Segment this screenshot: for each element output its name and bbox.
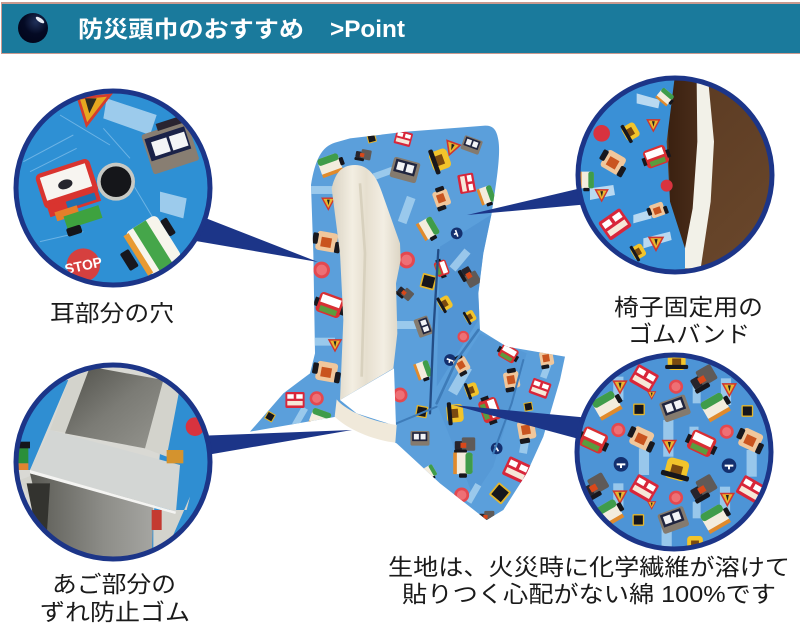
dark bus motif [142,118,199,174]
gray inner fabric upper [65,367,163,448]
title: 防災頭巾のおすすめ [78,16,304,42]
label: chin band [40,571,190,625]
fabric tyre stripes [590,93,672,248]
metal eyelet [97,163,135,201]
dark wood section [668,80,698,248]
subtitle point: >Point [330,16,405,43]
pointer wedge: ear hole [190,212,318,262]
blue fabric section [580,80,685,270]
pointer wedge: chin band [195,430,352,457]
panel: cotton fabric detail circle [574,353,773,551]
hood white lining [332,165,401,400]
label: chin band: ずれ防止ゴム [40,599,190,625]
chin strap [335,399,397,443]
icon: header ball [18,13,48,43]
label: chair band: 椅子固定用の [614,294,763,320]
label: cotton fabric [388,554,790,607]
stop sign motif [593,125,610,142]
label: chair band [614,294,763,347]
yellow warning sign [78,95,110,125]
dark shadow fold [26,483,50,530]
white rubber band [685,82,714,268]
label: chin band: あご部分の [52,571,176,597]
gray inner fabric lower [30,473,153,563]
grey elastic strap [30,460,180,514]
small red sign motif [661,180,673,192]
label: cotton fabric: 生地は、火災時に化学繊維が溶けて [388,554,790,580]
light hood inner edge [67,380,190,548]
car and sign motifs [579,87,676,262]
hood fabric body [250,126,565,520]
stop sign [65,248,102,280]
header bar [0,0,800,54]
fabric motifs near strap [17,417,204,530]
label: ear hole: 耳部分の穴 [50,300,174,326]
blue fabric sides [18,380,208,548]
tyre track stripes [103,98,187,218]
product photo: padded hood [250,126,565,523]
green car motif [120,216,180,276]
red car motif [36,159,102,236]
hood seams and folds [397,250,523,453]
gap behind chin strap [340,368,396,426]
stop sign: STOP [63,254,104,277]
label: cotton fabric: 貼りつく心配がない綿 100%です [402,581,776,607]
fabric motifs [574,353,768,551]
fabric motifs on hood [264,129,555,523]
fabric road texture [23,115,153,242]
panel: chin band detail circle [10,363,223,563]
pointer wedge: fabric [453,405,590,442]
panel: ear hole detail circle [14,89,212,287]
panel: chair band detail circle [570,75,774,275]
label: chair band: ゴムバンド [628,321,750,347]
pointer wedge: chair band [467,186,590,215]
